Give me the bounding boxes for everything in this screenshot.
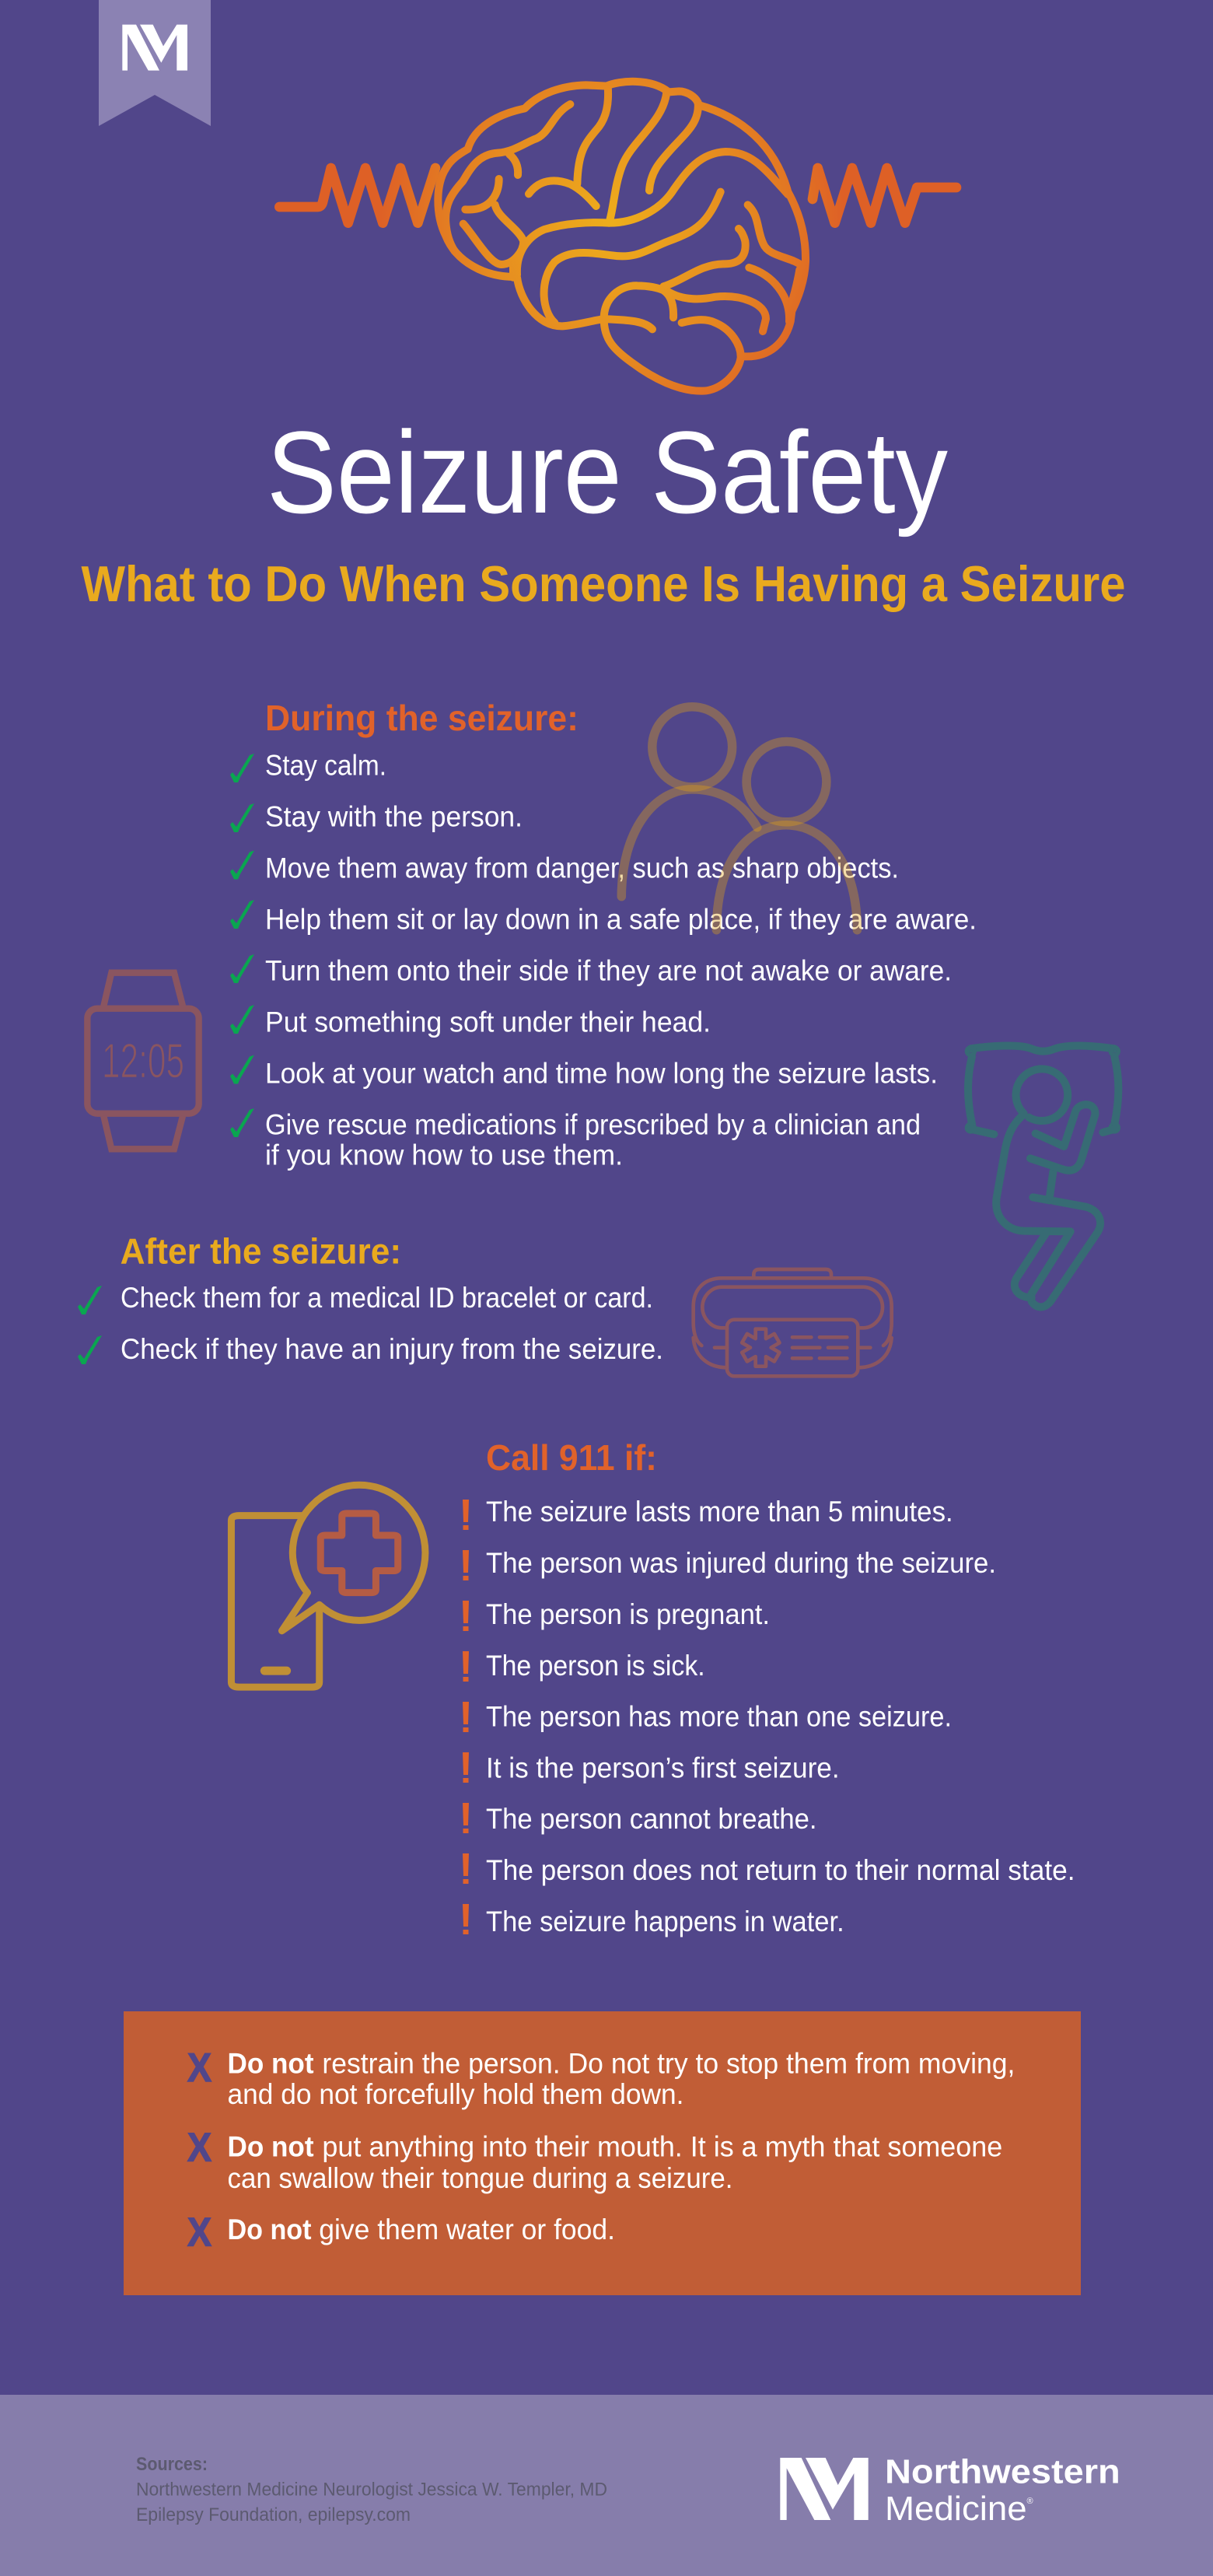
- panel: call 911: [463, 1437, 1075, 1937]
- during list: Move them away from danger, such as sharp objects.: [265, 852, 899, 884]
- after list: Check if they have an injury from the seizure.: [121, 1333, 663, 1365]
- do not text: [227, 2047, 1015, 2245]
- x marks: X: [187, 2210, 211, 2256]
- icon: medical ID bracelet: [694, 1269, 892, 1376]
- x marks: [187, 2046, 211, 2256]
- do not text: put anything into their mouth. It is a myth that someone: [322, 2131, 1002, 2162]
- panel: after the seizure: [78, 1230, 663, 1365]
- after checks: [78, 1286, 102, 1364]
- footer logo: Northwestern: [885, 2453, 1120, 2491]
- lobe folds: [517, 278, 652, 329]
- x marks: X: [187, 2125, 211, 2170]
- panel: footer: [0, 2395, 1213, 2576]
- during list: Give rescue medications if prescribed by a clinician and: [265, 1109, 921, 1141]
- call 911 list: The person is sick.: [486, 1650, 705, 1682]
- brain outline: [438, 82, 806, 356]
- lower lobe: [604, 319, 741, 391]
- call 911 list: The seizure lasts more than 5 minutes.: [486, 1496, 953, 1528]
- exclamation marks: [463, 1500, 469, 1934]
- panel: do not: [124, 2011, 1081, 2295]
- call 911 list: The person does not return to their normal state.: [486, 1854, 1075, 1886]
- x marks: X: [187, 2046, 211, 2091]
- icon: sleeping person: [968, 1045, 1118, 1307]
- footer logo: ®: [1026, 2497, 1033, 2506]
- check marks: [230, 754, 254, 1137]
- call 911 list: The person cannot breathe.: [486, 1803, 816, 1835]
- footer logo: Medicine: [885, 2490, 1027, 2528]
- left wave: [279, 168, 435, 223]
- panel: during the seizure: [230, 698, 977, 1171]
- during list: Look at your watch and time how long the seizure lasts.: [265, 1058, 938, 1090]
- footer logo: [780, 2453, 1120, 2528]
- do not text: and do not forcefully hold them down.: [227, 2078, 684, 2110]
- icon: brain with seizure waves: [279, 82, 956, 391]
- heading: after: After the seizure:: [121, 1230, 401, 1271]
- during list: Stay with the person.: [265, 801, 523, 832]
- after list: Check them for a medical ID bracelet or card.: [121, 1282, 653, 1314]
- after list: [121, 1282, 663, 1365]
- heading: call 911: Call 911 if:: [486, 1437, 657, 1478]
- call 911 list: It is the person’s first seizure.: [486, 1752, 840, 1784]
- do not text: give them water or food.: [319, 2214, 615, 2245]
- do not text: Do not: [227, 2214, 311, 2245]
- do not text: can swallow their tongue during a seizure.: [227, 2162, 732, 2194]
- sources: [136, 2454, 607, 2525]
- logo ribbon: [99, 0, 211, 126]
- sources: Northwestern Medicine Neurologist Jessica W. Templer, MD: [136, 2480, 607, 2500]
- during list: Put something soft under their head.: [265, 1006, 711, 1038]
- sources: Sources:: [136, 2454, 208, 2475]
- watch time: 12:05: [102, 1034, 184, 1089]
- icon: watch: [87, 973, 199, 1149]
- icon: two people: [621, 707, 857, 930]
- during list: if you know how to use them.: [265, 1139, 623, 1171]
- do not text: Do not: [227, 2131, 314, 2162]
- during list: [265, 750, 977, 1171]
- call 911 list: The person has more than one seizure.: [486, 1700, 952, 1733]
- right wave: [813, 168, 956, 223]
- during list: Help them sit or lay down in a safe place, if they are aware.: [265, 904, 977, 935]
- icon: phone with medical cross: [231, 1485, 425, 1687]
- call 911 list: The seizure happens in water.: [486, 1906, 844, 1937]
- call 911 list: [486, 1496, 1075, 1937]
- subtitle: What to Do When Someone Is Having a Seizure: [81, 555, 1126, 612]
- call 911 list: The person was injured during the seizure.: [486, 1547, 996, 1579]
- during list: Turn them onto their side if they are not awake or aware.: [265, 955, 952, 986]
- do not text: restrain the person. Do not try to stop them from moving,: [322, 2047, 1015, 2080]
- sources: Epilepsy Foundation, epilepsy.com: [136, 2504, 411, 2525]
- title: Seizure Safety: [267, 407, 948, 537]
- do not text: Do not: [227, 2047, 314, 2080]
- frontal folds: [446, 104, 570, 251]
- call 911 list: The person is pregnant.: [486, 1598, 770, 1630]
- during list: Stay calm.: [265, 750, 386, 781]
- heading: during: During the seizure:: [265, 698, 579, 738]
